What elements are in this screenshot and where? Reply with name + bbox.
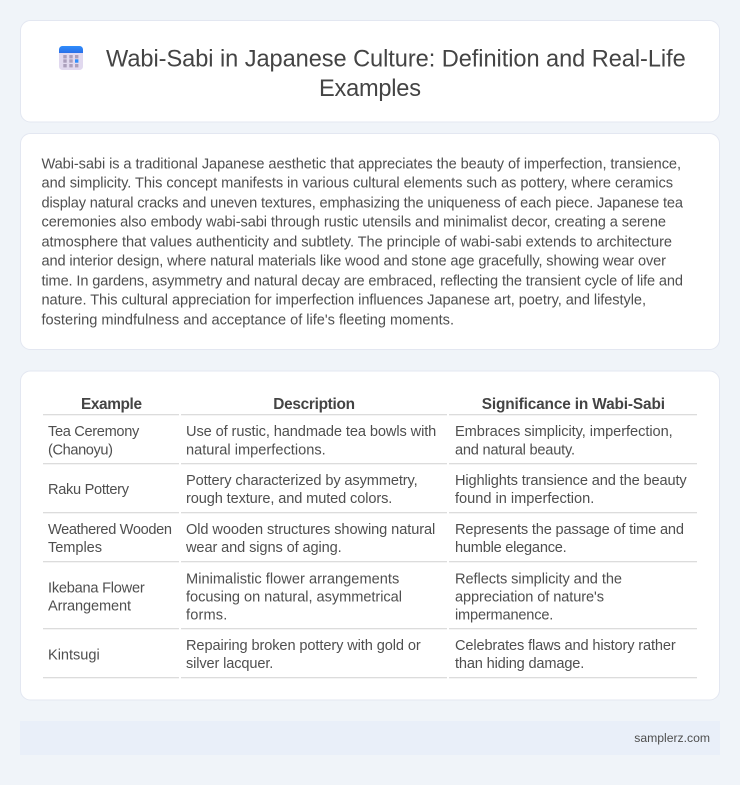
table row: Weathered Wooden Temples: humble elegance.: [455, 540, 567, 556]
table row: Ikebana Flower Arrangement: appreciation of nature's: [455, 589, 604, 605]
table row: Ikebana Flower Arrangement: focusing on natural, asymmetrical: [186, 589, 402, 605]
table row: Tea Ceremony: Tea Ceremony: [48, 424, 140, 440]
table row: Weathered Wooden Temples: Temples: [48, 540, 102, 556]
text block: description paragraph: Wabi-sabi is a traditional Japanese aesthetic that appreciates the beauty of imperfection, transience,: [42, 156, 681, 172]
table row: Raku Pottery: [48, 473, 687, 507]
table row: Kintsugi: silver lacquer.: [186, 656, 273, 672]
icon: calendar: [59, 46, 83, 70]
text block: description paragraph: time. In gardens, asymmetry and natural decay are embraced, reflecting the transient cycle of life and: [42, 273, 683, 289]
table row: Ikebana Flower Arrangement: forms.: [186, 607, 227, 623]
table row: Weathered Wooden Temples: [48, 522, 684, 556]
table row: Ikebana Flower Arrangement: Reflects simplicity and the: [455, 571, 622, 587]
table row: Kintsugi: than hiding damage.: [455, 656, 584, 672]
title: Wabi-Sabi in Japanese Culture: Definition and Real-Life: [106, 47, 686, 73]
text block: description paragraph: atmosphere that values authenticity and subtlety. The principle of wabi-sabi extends to architecture: [42, 234, 672, 250]
title: [106, 47, 686, 102]
text block: description paragraph: nature. This cultural appreciation for imperfection influences Japanese art, poetry, and lifestyle,: [42, 292, 646, 308]
text block: description paragraph: ceremonies also embody wabi-sabi through rustic utensils and minimalist decor, creating a serene: [42, 214, 666, 230]
table row: Tea Ceremony: (Chanoyu): [48, 442, 113, 458]
table header row: Significance in Wabi-Sabi: [482, 396, 665, 413]
table row: Raku Pottery: Highlights transience and the beauty: [455, 473, 687, 489]
panel: description: [20, 134, 720, 350]
table row: Tea Ceremony: Use of rustic, handmade tea bowls with: [186, 424, 436, 440]
text block: description paragraph: fostering mindfulness and acceptance of life's fleeting moments.: [42, 312, 454, 328]
text block: description paragraph: display natural cracks and uneven textures, emphasizing the uniqueness of each piece. Japanese tea: [42, 195, 684, 211]
table row: Raku Pottery: Raku Pottery: [48, 482, 130, 498]
table row: Ikebana Flower Arrangement: Minimalistic flower arrangements: [186, 571, 399, 587]
table row: Tea Ceremony: Embraces simplicity, imperfection,: [455, 424, 673, 440]
table row: Tea Ceremony: and natural beauty.: [455, 442, 575, 458]
table row: Weathered Wooden Temples: Old wooden structures showing natural: [186, 522, 435, 538]
table row: Ikebana Flower Arrangement: impermanence.: [455, 607, 553, 623]
table row: Raku Pottery: rough texture, and muted colors.: [186, 491, 392, 507]
footer: samplerz.com: [634, 731, 710, 745]
table header row: Description: [273, 396, 355, 413]
table row: Ikebana Flower Arrangement: Arrangement: [48, 598, 131, 614]
table header row: [81, 396, 665, 413]
table row: Kintsugi: Celebrates flaws and history rather: [455, 638, 676, 654]
table row: Ikebana Flower Arrangement: [48, 571, 622, 623]
title: Examples: [319, 76, 421, 102]
table row: Tea Ceremony: natural imperfections.: [186, 442, 326, 458]
table row: Kintsugi: Kintsugi: [48, 647, 100, 663]
table row: Raku Pottery: Pottery characterized by asymmetry,: [186, 473, 418, 489]
table row: Kintsugi: [48, 638, 676, 672]
text block: description paragraph: and simplicity. This concept manifests in various cultural elements such as pottery, where ceramics: [42, 175, 673, 191]
footer: [20, 721, 720, 755]
table row: Tea Ceremony: [48, 424, 673, 458]
table row: Ikebana Flower Arrangement: Ikebana Flower: [48, 580, 145, 596]
table row: Raku Pottery: found in imperfection.: [455, 491, 594, 507]
table row: Kintsugi: Repairing broken pottery with gold or: [186, 638, 421, 654]
table row: Weathered Wooden Temples: wear and signs of aging.: [185, 540, 342, 556]
panel: header: [20, 20, 720, 122]
table row: Weathered Wooden Temples: Represents the passage of time and: [455, 522, 684, 538]
text block: description paragraph: [42, 156, 684, 328]
text block: description paragraph: and interior design, where natural materials like wood and stone age gracefully, showing wear over: [42, 253, 666, 269]
table row: Weathered Wooden Temples: Weathered Wooden: [48, 522, 172, 538]
panel: examples table: [20, 371, 720, 700]
table header row: Example: [81, 396, 142, 413]
